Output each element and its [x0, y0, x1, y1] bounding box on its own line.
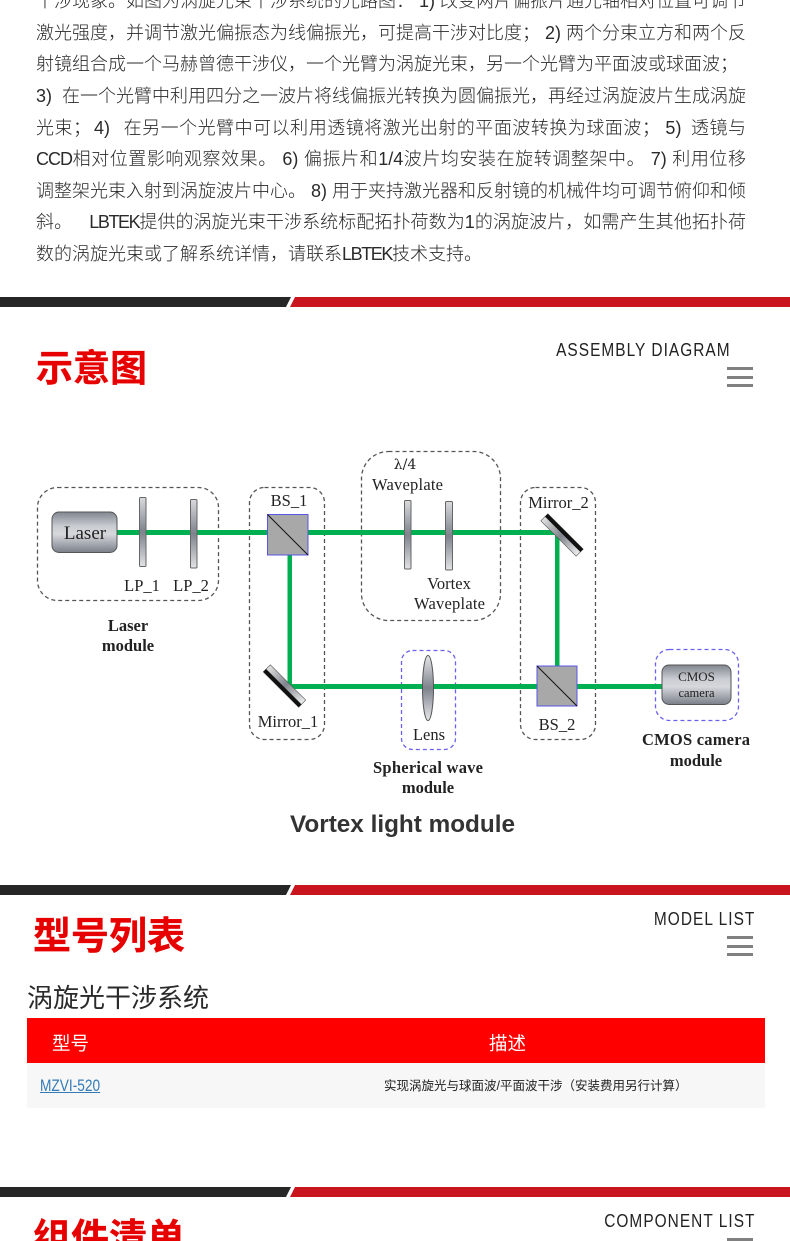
icon: menu lines	[727, 936, 753, 956]
label Mirror_2: Mirror_2	[528, 493, 589, 512]
label: lambda/4 waveplate: Waveplate	[372, 475, 443, 494]
text block: system description: 数的涡旋光束或了解系统详情，请联系LBTEK技术支持。	[36, 244, 482, 264]
labels LP_1 LP_2	[124, 576, 209, 595]
CMOS camera: camera	[678, 686, 715, 700]
label: vortex waveplate: Waveplate	[414, 594, 485, 613]
section divider bar: assembly diagram	[0, 297, 790, 307]
table header: 型号	[52, 1033, 89, 1054]
plate: lambda/4 waveplate	[404, 500, 411, 569]
heading: 型号列表: 型号列表	[33, 916, 185, 958]
model table	[27, 1018, 765, 1108]
section divider bar: component list	[0, 1187, 790, 1197]
polarizer LP_2	[190, 500, 197, 568]
label: ASSEMBLY DIAGRAM: ASSEMBLY DIAGRAM	[557, 340, 731, 360]
caption: Spherical wave module	[373, 758, 483, 797]
labels LP_1 LP_2: LP_1	[124, 576, 160, 595]
label: COMPONENT LIST: COMPONENT LIST	[604, 1211, 755, 1231]
text block: system description: CCD相对位置影响观察效果。 6) 偏振片和1/4波片均安装在旋转调整架中。 7) 利用位移	[36, 149, 746, 169]
label: vortex waveplate: Vortex	[427, 574, 472, 593]
text block: system description: 调整架光束入射到涡旋波片中心。 8) 用于夹持激光器和反射镜的机械件均可调节俯仰和倾	[36, 181, 746, 201]
text block: system description: 激光强度，并调节激光偏振态为线偏振光，可提高干涉对比度； 2) 两个分束立方和两个反	[36, 23, 746, 43]
label Lens: Lens	[413, 725, 445, 744]
mirror Mirror_2	[541, 514, 583, 556]
laser source: Laser	[64, 523, 107, 544]
lens	[422, 656, 434, 720]
module box: waveplates	[362, 452, 500, 620]
label BS_1: BS_1	[271, 491, 307, 510]
module box: Mirror_2 and BS_2	[520, 488, 596, 740]
heading: 示意图: 示意图	[36, 348, 147, 389]
table row: MZVI-520: 实现涡旋光与球面波/平面波干涉（安装费用另行计算）	[384, 1079, 687, 1093]
label Mirror_1: Mirror_1	[258, 712, 318, 731]
icon: menu lines	[727, 367, 753, 387]
caption: Laser module	[102, 616, 154, 655]
table row: MZVI-520: MZVI-520	[40, 1077, 100, 1095]
module box: lens	[402, 650, 456, 750]
text block: system description: 斜。 LBTEK提供的涡旋光束干涉系统标配拓扑荷数为1的涡旋波片，如需产生其他拓扑荷	[36, 212, 746, 232]
caption: CMOS camera module: module	[670, 751, 722, 770]
caption: Laser module: Laser	[108, 616, 148, 635]
caption: Spherical wave module: Spherical wave	[373, 758, 483, 777]
text block: system description: 3) 在一个光臂中利用四分之一波片将线偏振光转换为圆偏振光，再经过涡旋波片生成涡旋	[36, 86, 746, 106]
CMOS camera	[662, 665, 731, 704]
laser source	[52, 512, 117, 552]
caption: CMOS camera module	[642, 730, 750, 770]
table row: MZVI-520	[40, 1077, 687, 1095]
label BS_2: BS_2	[539, 715, 575, 734]
table header	[27, 1018, 765, 1063]
plate: vortex waveplate	[446, 502, 452, 570]
label: vortex waveplate	[414, 574, 485, 613]
label: lambda/4 waveplate: λ/4	[394, 457, 416, 473]
labels LP_1 LP_2: LP_2	[173, 576, 209, 595]
text block: system description: 射镜组合成一个马赫曾德干涉仪，一个光臂为涡旋光束，另一个光臂为平面波或球面波；	[36, 54, 738, 74]
text block: system description: 光束；4) 在另一个光臂中可以利用透镜将激光出射的平面波转换为球面波； 5) 透镜与	[36, 118, 746, 138]
beam splitter BS_1	[268, 514, 308, 555]
module box: CMOS camera	[656, 650, 738, 720]
caption: CMOS camera module: CMOS camera	[642, 730, 750, 749]
icon: menu lines	[727, 1238, 753, 1241]
polarizer LP_1	[140, 498, 146, 566]
optical path diagram	[36, 450, 750, 838]
table title: 涡旋光干涉系统	[27, 983, 209, 1013]
caption: Vortex light module: Vortex light module	[290, 811, 515, 838]
section divider bar: model list	[0, 885, 790, 895]
caption: Spherical wave module: module	[402, 778, 454, 797]
label: lambda/4 waveplate	[372, 457, 443, 494]
label: MODEL LIST: MODEL LIST	[654, 909, 755, 929]
module box: BS_1 and Mirror_1	[250, 488, 324, 740]
CMOS camera: CMOS	[678, 669, 715, 684]
module box: laser	[38, 488, 218, 600]
mirror Mirror_1	[263, 665, 306, 707]
caption: Laser module: module	[102, 636, 154, 655]
table header: 描述	[489, 1033, 526, 1054]
text block: system description	[36, 0, 746, 264]
beam splitter BS_2	[537, 666, 577, 706]
green beam path	[117, 530, 662, 689]
